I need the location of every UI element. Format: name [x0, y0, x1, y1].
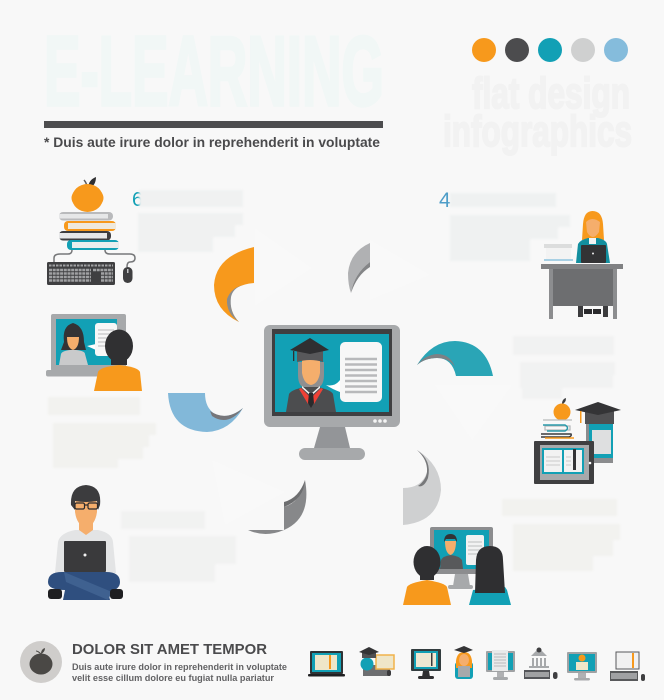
subtitle: * Duis aute irure dolor in reprehenderit in voluptate — [44, 135, 380, 150]
icon: woman at desk — [541, 211, 623, 319]
stat ghost text: top right — [450, 193, 570, 261]
footer text: velit esse cillum dolore eu fugiat nulla pariatur — [72, 673, 274, 684]
ghost heading: flat design infographics — [443, 69, 632, 156]
cycle arc: dark grey — [248, 480, 306, 534]
cycle arc: teal — [417, 341, 493, 376]
footer icon: monitor with student — [567, 652, 597, 680]
stat block: 62% top left — [132, 189, 243, 252]
graduate figure — [286, 338, 336, 412]
speech bubble — [326, 342, 382, 402]
footer apple badge — [20, 641, 62, 683]
footer icon: bank and keyboard — [524, 648, 558, 679]
stat block: 56% right — [513, 336, 615, 399]
footer icon: female graduate — [454, 646, 473, 679]
title: E-LEARNING — [44, 16, 384, 126]
central monitor with graduate — [264, 325, 400, 460]
cycle arc: light grey — [403, 450, 441, 525]
stat block: 46% bottom right — [502, 499, 620, 571]
icon: two people watching monitor — [403, 527, 511, 605]
icon: man with laptop sitting cross-legged — [48, 485, 123, 600]
cycle arc: grey — [348, 243, 370, 293]
stat block: 47% top right: 4 — [439, 189, 451, 212]
icon: apple, books, keyboard and mouse — [47, 177, 135, 285]
footer icon: monitor with document — [486, 650, 515, 680]
icon: books, graduation cap, phone and tablet — [534, 398, 621, 484]
faint ghost arrows around monitor — [212, 228, 512, 525]
footer icon: laptop with book and keyboard — [610, 652, 645, 681]
cycle arc: light blue — [168, 393, 243, 432]
cycle arc: orange — [214, 247, 254, 322]
colour palette dots — [472, 38, 628, 62]
title rule — [44, 121, 383, 128]
stat ghost text: top left — [138, 190, 243, 252]
stat block: 70% bottom left — [121, 511, 236, 582]
footer icon: laptop with book — [308, 651, 345, 676]
footer text: Duis aute irure dolor in reprehenderit in voluptate — [72, 662, 287, 673]
footer heading: DOLOR SIT AMET TEMPOR — [72, 641, 267, 658]
stat block: 47% top right — [439, 189, 570, 261]
footer icon: cap, globe and frame — [359, 647, 394, 676]
icon: laptop video call — [46, 314, 142, 391]
stat block: 9% left — [48, 397, 156, 468]
stat block: 62% top left: 6 — [132, 189, 143, 211]
footer text — [72, 662, 287, 684]
footer icon: monitor with book — [411, 649, 441, 679]
